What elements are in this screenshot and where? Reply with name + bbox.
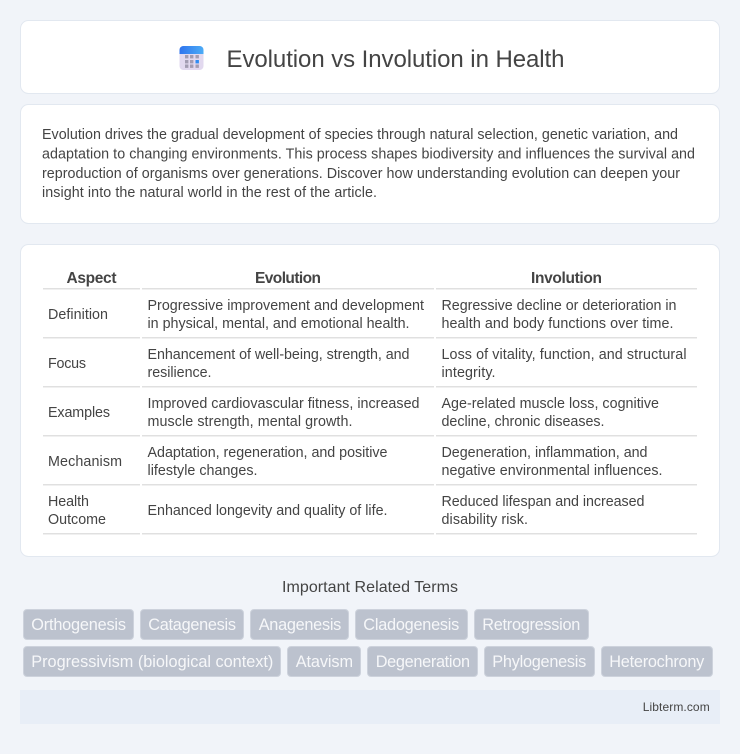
tag: Catagenesis: Catagenesis bbox=[148, 616, 236, 634]
tag: Anagenesis: Anagenesis bbox=[259, 616, 341, 634]
tag: Phylogenesis bbox=[484, 646, 594, 676]
row: health outcome: Outcome bbox=[48, 512, 106, 528]
row: examples: Improved cardiovascular fitness, increased bbox=[148, 396, 420, 412]
tag: Cladogenesis bbox=[356, 610, 468, 640]
header panel bbox=[20, 20, 720, 94]
row: examples: muscle strength, mental growth. bbox=[148, 414, 352, 430]
tag: Progressivism bbox=[24, 646, 280, 676]
tag: Cladogenesis: Cladogenesis bbox=[363, 616, 459, 634]
row: health outcome bbox=[48, 494, 645, 528]
tag: Retrogression bbox=[474, 610, 588, 640]
row: definition: health and body functions over time. bbox=[442, 316, 674, 332]
row: examples: Age-related muscle loss, cognitive bbox=[442, 396, 659, 412]
row: health outcome: Enhanced longevity and quality of life. bbox=[148, 503, 388, 519]
tag: Heterochrony bbox=[602, 646, 712, 676]
intro text block bbox=[42, 127, 695, 201]
panel: introduction bbox=[20, 104, 720, 224]
footer bar bbox=[20, 690, 720, 724]
row: mechanism bbox=[48, 445, 662, 479]
tag: Degeneration: Degeneration bbox=[376, 653, 470, 671]
row: definition: Progressive improvement and development bbox=[148, 298, 424, 314]
table header: Aspect bbox=[66, 270, 116, 287]
row: focus: Loss of vitality, function, and structural bbox=[442, 347, 686, 363]
tag: Degeneration bbox=[368, 646, 478, 676]
row: mechanism: negative environmental influences. bbox=[442, 463, 662, 479]
intro text block: insight into the natural world in the rest of the article. bbox=[42, 185, 377, 201]
tag: Retrogression: Retrogression bbox=[482, 616, 580, 634]
panel: comparison table bbox=[20, 244, 720, 556]
row: focus: Focus bbox=[48, 356, 86, 372]
row: definition: Regressive decline or deterioration in bbox=[442, 298, 677, 314]
row: mechanism: lifestyle changes. bbox=[148, 463, 258, 479]
tag: Atavism bbox=[288, 646, 360, 676]
tag: Progressivism: Progressivism (biological context) bbox=[31, 653, 273, 671]
row: mechanism: Adaptation, regeneration, and positive bbox=[148, 445, 388, 461]
row: focus bbox=[48, 347, 686, 381]
table header: Evolution bbox=[255, 270, 321, 287]
row: health outcome: Health bbox=[48, 494, 89, 510]
table header bbox=[66, 270, 602, 287]
tag: Orthogenesis bbox=[24, 610, 134, 640]
intro text block: Evolution drives the gradual development of species through natural selection, genetic variation, and bbox=[42, 127, 678, 143]
title: Evolution vs Involution in Health bbox=[226, 46, 564, 73]
tag: Heterochrony: Heterochrony bbox=[609, 653, 705, 671]
tag: Anagenesis bbox=[250, 610, 348, 640]
related terms heading: Important Related Terms bbox=[282, 579, 458, 596]
row: definition bbox=[48, 298, 677, 332]
tag: Catagenesis bbox=[140, 610, 244, 640]
footer credit: Libterm.com bbox=[643, 700, 710, 714]
row: health outcome: Reduced lifespan and increased bbox=[442, 494, 645, 510]
row: mechanism: Degeneration, inflammation, and bbox=[442, 445, 648, 461]
row: examples: Examples bbox=[48, 405, 110, 421]
row: definition: in physical, mental, and emotional health. bbox=[148, 316, 410, 332]
row: health outcome: disability risk. bbox=[442, 512, 528, 528]
row: definition: Definition bbox=[48, 307, 108, 323]
row: focus: Enhancement of well-being, strength, and bbox=[148, 347, 410, 363]
row: examples bbox=[48, 396, 659, 430]
related term tags bbox=[24, 610, 712, 676]
icon: calendar bbox=[180, 46, 204, 70]
intro text block: reproduction of organisms over generations. Discover how understanding evolution can deepen your bbox=[42, 166, 680, 182]
row: examples: decline, chronic diseases. bbox=[442, 414, 604, 430]
tag: Phylogenesis: Phylogenesis bbox=[492, 653, 586, 671]
row: focus: integrity. bbox=[442, 365, 496, 381]
row: focus: resilience. bbox=[148, 365, 212, 381]
tag: Atavism: Atavism bbox=[296, 653, 353, 671]
tag: Orthogenesis: Orthogenesis bbox=[31, 616, 126, 634]
row: mechanism: Mechanism bbox=[48, 454, 122, 470]
table header: Involution bbox=[531, 270, 602, 287]
intro text block: adaptation to changing environments. This process shapes biodiversity and influences the survival and bbox=[42, 146, 695, 162]
